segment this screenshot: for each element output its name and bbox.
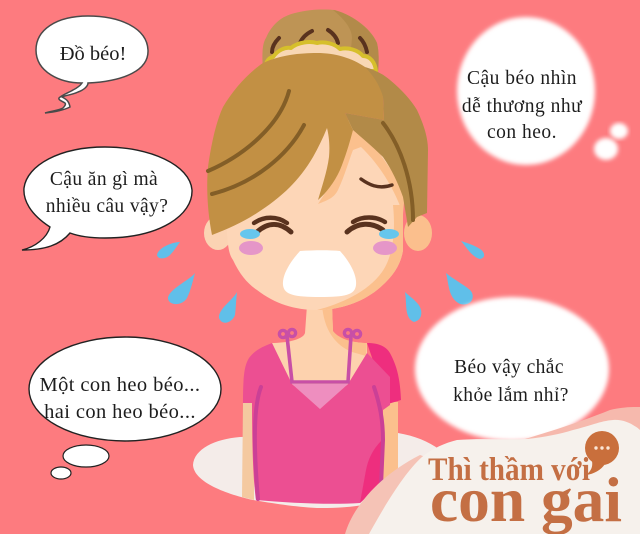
white hole ellipse xyxy=(193,433,440,508)
thought dot small xyxy=(51,467,71,479)
neck and chest xyxy=(272,305,367,386)
fluffy bubble: Cậu béo nhìn xyxy=(457,17,628,165)
bubble text: dễ thương như xyxy=(462,96,583,117)
left bow xyxy=(279,329,296,338)
bubble text xyxy=(46,169,168,217)
bubble text: Cậu ăn gì mà xyxy=(50,169,158,190)
speech bubble: Cậu ăn gì xyxy=(22,147,192,250)
character: body xyxy=(242,305,401,504)
right sleeve shadow xyxy=(367,343,401,404)
straps xyxy=(287,336,351,382)
speech bubble: Đồ béo xyxy=(36,16,148,113)
character: fringe shadow xyxy=(318,125,405,214)
right bow xyxy=(344,329,361,338)
bubble text xyxy=(40,374,200,423)
bubble text: khỏe lắm nhỉ? xyxy=(453,385,569,406)
hair band xyxy=(265,42,376,71)
right arm xyxy=(382,402,398,484)
character: fringe hair xyxy=(207,53,384,235)
left arm xyxy=(242,402,254,500)
character: eyes xyxy=(254,179,392,232)
chat bubble icon xyxy=(585,431,619,475)
logo banner xyxy=(345,407,640,534)
thought dot large xyxy=(63,445,109,467)
fluffy bubble: Béo vậy xyxy=(415,297,609,441)
bubble text: Cậu béo nhìn xyxy=(467,68,577,89)
bubble text: hai con heo béo... xyxy=(44,401,196,423)
bubble text: con heo. xyxy=(487,122,557,143)
neckline inset xyxy=(292,384,348,409)
character: hair bun xyxy=(262,9,379,72)
bubble text: Béo vậy chắc xyxy=(454,357,564,378)
tears and cheeks xyxy=(239,229,399,255)
logo banner: con gai xyxy=(430,464,622,534)
bubble text xyxy=(462,68,583,143)
character: ears xyxy=(204,215,432,251)
mouth xyxy=(283,250,356,297)
speech bubble: Một con heo xyxy=(29,337,221,479)
character: hair strands xyxy=(208,91,413,220)
character: face xyxy=(227,120,403,310)
character: dark hair side xyxy=(345,67,428,227)
shirt shadow xyxy=(360,440,382,503)
bubble text xyxy=(453,357,569,406)
logo text: Thì thầm với xyxy=(428,452,590,488)
bubble text: Một con heo béo... xyxy=(40,374,200,396)
bubble text: Đồ béo! xyxy=(60,43,126,65)
shirt side seams xyxy=(255,387,261,499)
shirt xyxy=(243,343,390,504)
teardrops xyxy=(157,241,484,323)
bubble text: nhiều câu vậy? xyxy=(46,196,168,217)
